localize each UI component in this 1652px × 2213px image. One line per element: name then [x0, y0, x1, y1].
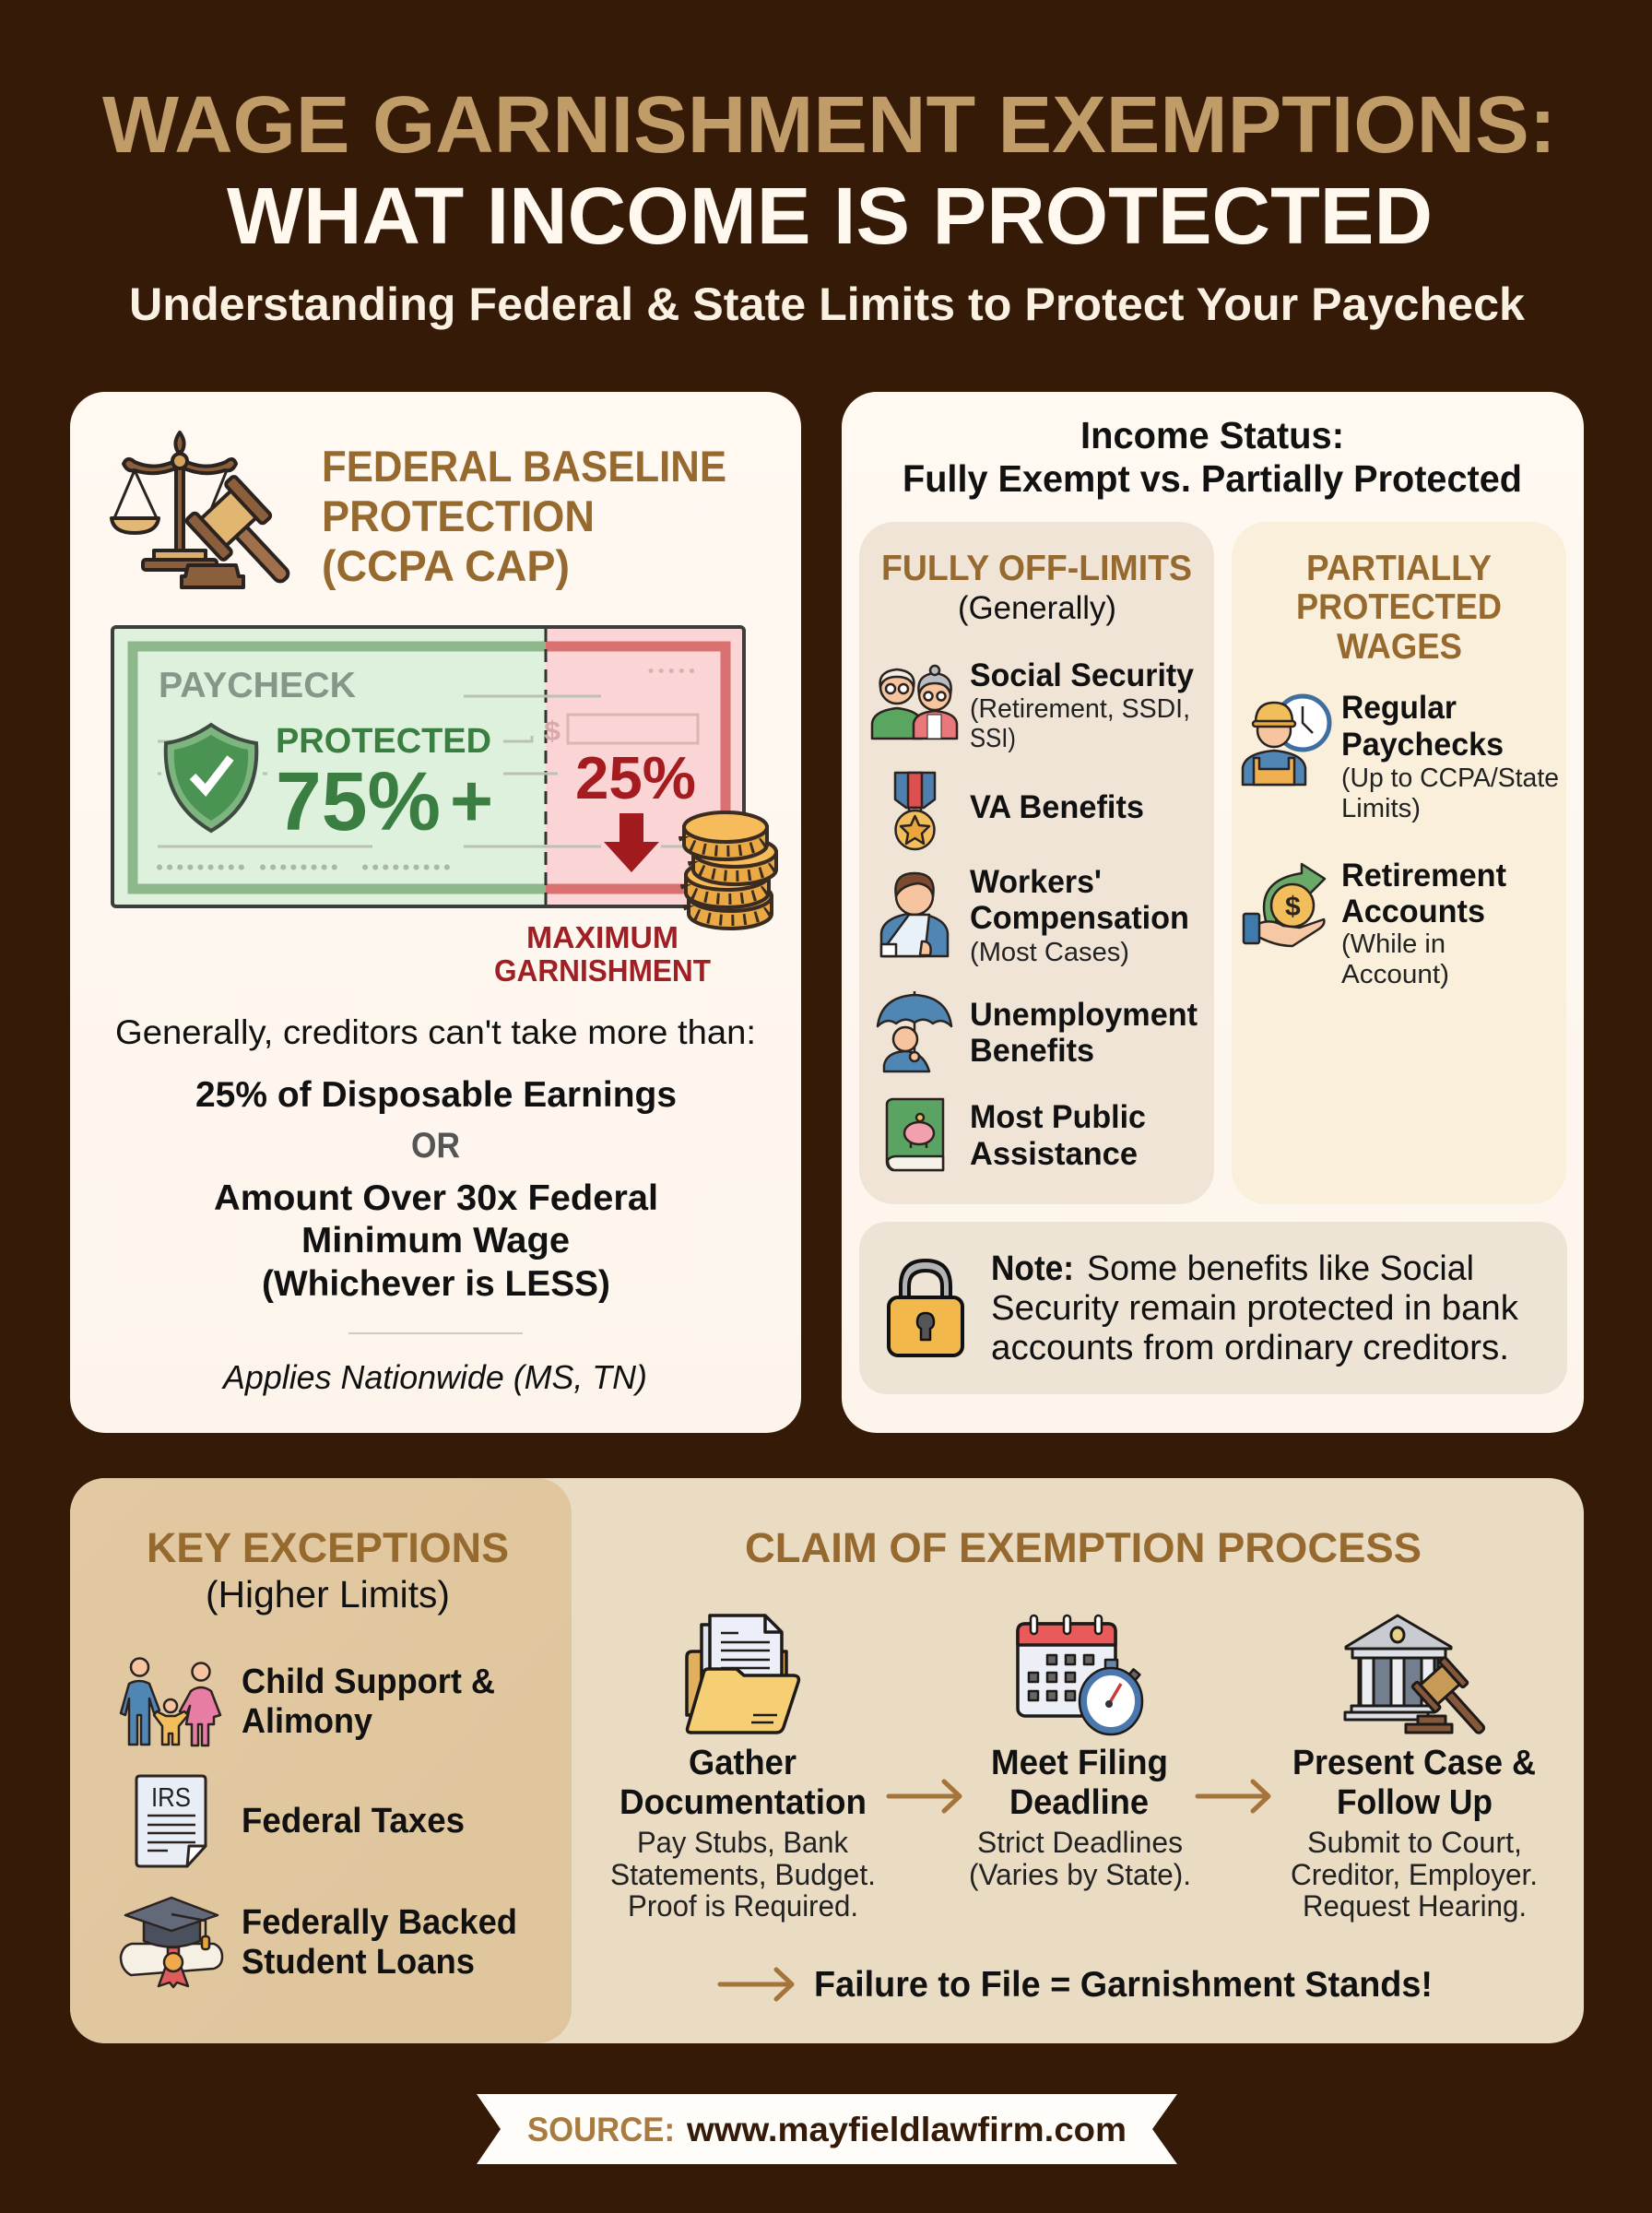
- heading: partially protected wages: [1296, 549, 1502, 667]
- text: retirement accounts: Accounts: [1341, 893, 1485, 929]
- icon: book with piggy bank: [887, 1099, 943, 1170]
- text: retirement accounts: [1341, 858, 1506, 989]
- text: regular paychecks: Limits): [1341, 794, 1421, 823]
- item: va benefits: [895, 773, 1144, 849]
- text: gather documentation: Proof is Required.: [628, 1889, 858, 1923]
- label: maximum garnishment: MAXIMUM: [526, 920, 678, 954]
- panel: income status: [842, 392, 1584, 1433]
- text: limit explanation: OR: [411, 1126, 460, 1166]
- text: meet filing deadline: (Varies by State).: [969, 1858, 1191, 1891]
- heading: income status: Income Status:: [1080, 414, 1344, 456]
- step 3: present case and follow up: [1291, 1615, 1538, 1923]
- text: workers compensation: Workers': [970, 864, 1102, 900]
- heading: income status: Fully Exempt vs. Partially Protected: [903, 457, 1522, 500]
- text: note: Security remain protected in bank: [991, 1289, 1519, 1328]
- text: limit explanation: (Whichever is LESS): [262, 1264, 610, 1304]
- item: social security: [872, 657, 1195, 753]
- text: present case and follow up: Submit to Court,: [1307, 1826, 1522, 1859]
- text: public assistance: [970, 1099, 1146, 1172]
- column: partially protected wages: [1232, 522, 1566, 1204]
- heading: key exceptions: KEY EXCEPTIONS: [147, 1524, 509, 1571]
- text: unemployment benefits: Unemployment: [970, 997, 1198, 1033]
- text: workers compensation: [970, 864, 1189, 967]
- item: child support: [121, 1658, 495, 1746]
- icon: medal: [895, 773, 935, 849]
- text: limit explanation: 25% of Disposable Earnings: [195, 1075, 677, 1115]
- text: public assistance: Assistance: [970, 1136, 1138, 1172]
- icon: folder with documents: [687, 1615, 798, 1733]
- text: meet filing deadline: [969, 1744, 1191, 1891]
- icon: worker and clock: [1243, 696, 1329, 785]
- arrow: down: [604, 813, 659, 872]
- icon: IRS document: [136, 1776, 206, 1866]
- text: student loans: Federally Backed: [242, 1903, 517, 1942]
- arrow: step 1 to step 2: [889, 1781, 960, 1811]
- icon: person under umbrella: [878, 991, 951, 1071]
- text: child support: Alimony: [242, 1702, 372, 1741]
- text: regular paychecks: Regular: [1341, 690, 1457, 726]
- text: gather documentation: Statements, Budget.: [610, 1858, 876, 1891]
- callout: note: [859, 1222, 1567, 1394]
- text: retirement accounts: (While in: [1341, 929, 1446, 959]
- heading: federal baseline protection: PROTECTION: [322, 491, 595, 540]
- item: student loans: [121, 1898, 517, 1987]
- text: gather documentation: [610, 1744, 876, 1923]
- panel: key exceptions: [70, 1478, 572, 2043]
- text: applies nationwide: Applies Nationwide (MS, TN): [221, 1358, 647, 1396]
- chart: paycheck split 75 / 25: [112, 627, 744, 906]
- icon: hand with coin: $: [1285, 892, 1301, 922]
- icon: graduation cap and diploma: [121, 1898, 222, 1987]
- text: va benefits: VA Benefits: [970, 789, 1144, 825]
- item: public assistance: [887, 1099, 1146, 1172]
- text: federal taxes: Federal Taxes: [242, 1802, 465, 1840]
- text: retirement accounts: Retirement: [1341, 858, 1506, 893]
- text: gather documentation: Documentation: [620, 1783, 867, 1822]
- icon: coin stack: [684, 812, 776, 929]
- heading: federal baseline protection: (CCPA CAP): [322, 541, 570, 590]
- item: retirement accounts: [1244, 858, 1506, 989]
- heading: partially protected wages: PROTECTED: [1296, 587, 1502, 627]
- icon: padlock: [889, 1260, 962, 1355]
- text: social security: SSI): [970, 724, 1016, 753]
- text: retirement accounts: Account): [1341, 960, 1449, 989]
- icon: courthouse and gavel: [1345, 1615, 1498, 1746]
- text: present case and follow up: Creditor, Employer.: [1291, 1858, 1538, 1891]
- arrow: failure to file: [720, 1970, 792, 1999]
- label: 25 percent: 25%: [575, 744, 696, 811]
- icon: injured worker: [881, 873, 948, 956]
- text: gather documentation: Pay Stubs, Bank: [637, 1826, 849, 1859]
- text: workers compensation: (Most Cases): [970, 938, 1129, 967]
- panel: bottom container: [70, 1478, 1584, 2043]
- panel: federal baseline protection: [70, 392, 801, 1433]
- item: unemployment benefits: [878, 991, 1198, 1071]
- footer ribbon: source: [477, 2094, 1177, 2164]
- heading: fully off-limits: FULLY OFF-LIMITS: [881, 549, 1192, 588]
- text: unemployment benefits: [970, 997, 1198, 1069]
- title line 2: WHAT INCOME IS PROTECTED: [227, 172, 1433, 261]
- text: note: Note:: [991, 1249, 1074, 1288]
- text: limit explanation: Minimum Wage: [301, 1221, 570, 1260]
- text: child support: Child Support &: [242, 1663, 495, 1701]
- column: fully off-limits: [859, 522, 1214, 1204]
- text: regular paychecks: (Up to CCPA/State: [1341, 763, 1559, 793]
- panel: claim of exemption process: [610, 1524, 1538, 2005]
- label: maximum garnishment: [494, 920, 711, 988]
- label: dollar sign: $: [544, 716, 560, 747]
- text: child support: [242, 1663, 495, 1741]
- text: source: SOURCE:: [527, 2111, 675, 2148]
- text: public assistance: Most Public: [970, 1099, 1146, 1135]
- label: protected: PROTECTED: [276, 722, 491, 761]
- text: regular paychecks: Paychecks: [1341, 727, 1504, 763]
- heading: claim of exemption process: CLAIM OF EXEMPTION PROCESS: [745, 1524, 1422, 1571]
- step 2: meet filing deadline: [969, 1615, 1191, 1891]
- callout: failure to file: [720, 1965, 1433, 2005]
- text: meet filing deadline: Deadline: [1009, 1783, 1149, 1822]
- label: 75 percent plus: 75%: [276, 756, 441, 848]
- label: plus: +: [450, 760, 493, 842]
- text: limit explanation: Amount Over 30x Federal: [214, 1178, 658, 1218]
- icon: seniors: [872, 666, 957, 739]
- label: maximum garnishment: GARNISHMENT: [494, 953, 711, 988]
- text: unemployment benefits: Benefits: [970, 1033, 1094, 1069]
- heading: partially protected wages: PARTIALLY: [1306, 549, 1492, 588]
- text: present case and follow up: Present Case &: [1292, 1744, 1536, 1782]
- heading: fully off-limits: [881, 549, 1192, 626]
- text: meet filing deadline: Meet Filing: [991, 1744, 1168, 1782]
- icon: hand with coin: [1244, 864, 1325, 946]
- icon: scales and gavel: [112, 432, 310, 601]
- heading: federal baseline protection: [322, 442, 726, 590]
- text: student loans: Student Loans: [242, 1943, 475, 1982]
- icon: calendar and stopwatch: [1018, 1615, 1142, 1734]
- icon: family: [121, 1658, 220, 1746]
- text: limit explanation: [115, 1013, 756, 1304]
- item: workers compensation: [881, 864, 1189, 967]
- icon: IRS document: IRS: [151, 1783, 191, 1813]
- text: meet filing deadline: Strict Deadlines: [977, 1826, 1183, 1859]
- text: source: www.mayfieldlawfirm.com: [686, 2111, 1127, 2148]
- subtitle: Understanding Federal & State Limits to Protect Your Paycheck: [129, 278, 1525, 330]
- text: present case and follow up: Request Hearing.: [1303, 1889, 1527, 1923]
- text: social security: Social Security: [970, 657, 1195, 693]
- title block: [102, 80, 1556, 330]
- heading: partially protected wages: WAGES: [1337, 627, 1462, 667]
- arrow: step 2 to step 3: [1198, 1781, 1268, 1811]
- text: note: [991, 1249, 1519, 1367]
- item: regular paychecks: [1243, 690, 1559, 823]
- text: limit explanation: Generally, creditors can't take more than:: [115, 1013, 756, 1051]
- text: failure to file: Failure to File = Garnishment Stands!: [814, 1965, 1433, 2005]
- heading: federal baseline protection: FEDERAL BASELINE: [322, 442, 726, 491]
- text: workers compensation: Compensation: [970, 900, 1189, 936]
- heading: fully off-limits: (Generally): [958, 590, 1116, 626]
- item: federal taxes: [136, 1776, 465, 1866]
- text: note: accounts from ordinary creditors.: [991, 1329, 1509, 1367]
- step 1: gather documentation: [610, 1615, 876, 1923]
- text: student loans: [242, 1903, 517, 1982]
- text: regular paychecks: [1341, 690, 1559, 823]
- label: paycheck: PAYCHECK: [159, 666, 356, 705]
- text: note: Some benefits like Social: [1087, 1249, 1474, 1288]
- icon: green shield: [166, 725, 256, 831]
- heading: income status: [903, 414, 1522, 500]
- text: present case and follow up: Follow Up: [1337, 1783, 1493, 1822]
- text: social security: (Retirement, SSDI,: [970, 694, 1190, 724]
- title line 1: WAGE GARNISHMENT EXEMPTIONS:: [102, 80, 1556, 170]
- text: present case and follow up: [1291, 1744, 1538, 1923]
- text: gather documentation: Gather: [689, 1744, 796, 1782]
- heading: key exceptions: [147, 1524, 509, 1615]
- text: social security: [970, 657, 1195, 753]
- heading: key exceptions: (Higher Limits): [206, 1573, 450, 1615]
